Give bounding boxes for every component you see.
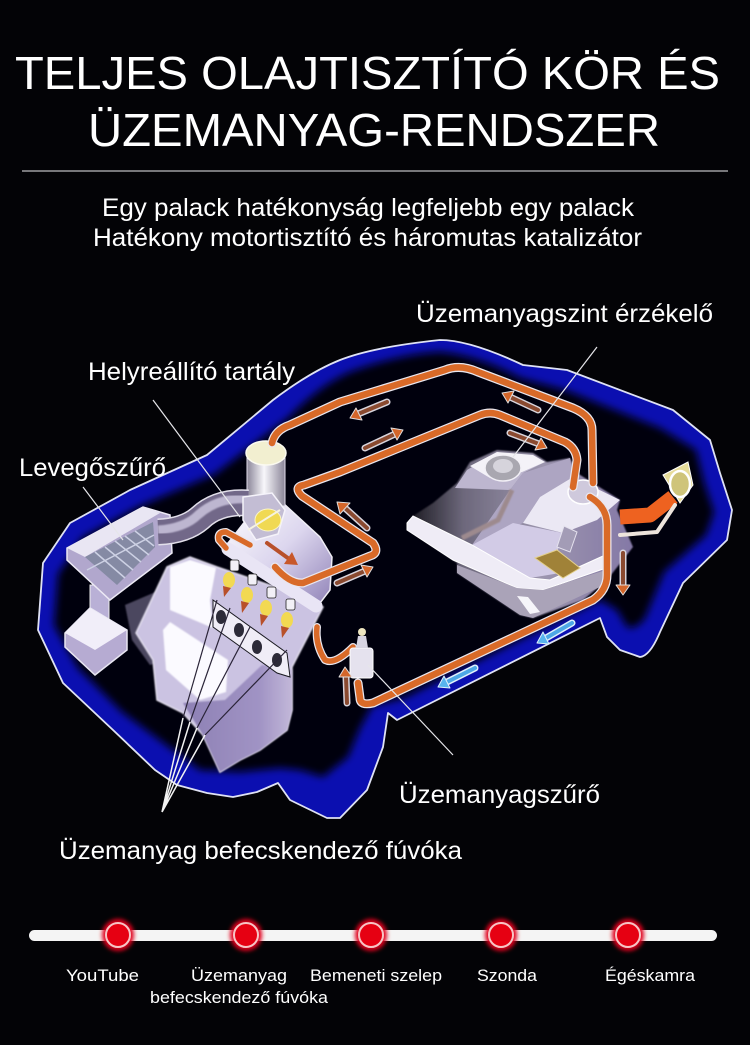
cylinder head — [225, 500, 332, 607]
tank silhouette — [407, 450, 633, 618]
fuel tank — [407, 450, 633, 618]
timeline dots — [102, 919, 644, 951]
fuel rail — [228, 549, 316, 606]
subtitle — [93, 194, 642, 252]
air filter box — [67, 507, 172, 600]
blue arrows — [438, 623, 572, 688]
tank seat — [472, 523, 578, 578]
car silhouette — [38, 340, 732, 818]
fuel pump — [557, 526, 577, 552]
tank skirt highlight — [517, 596, 540, 614]
tank neck — [568, 480, 598, 504]
intake hose — [158, 499, 248, 532]
engine highlight upper — [170, 560, 216, 628]
tank top highlight — [470, 452, 545, 478]
tank right block — [523, 477, 620, 533]
pipe orange — [219, 367, 675, 704]
flow arrows — [267, 391, 630, 703]
timeline labels: Bemeneti szelep — [310, 966, 442, 985]
air filter stand — [65, 585, 127, 675]
intake manifold — [213, 600, 290, 677]
injectors — [223, 560, 295, 638]
throttle body — [243, 493, 285, 540]
timeline labels: Üzemanyag — [191, 966, 287, 985]
leader lines — [83, 347, 597, 812]
label: fuel level sensor: Üzemanyagszint érzékelő — [416, 300, 713, 328]
canister — [246, 441, 286, 506]
orange arrows — [267, 391, 630, 703]
fuel pipes — [219, 367, 675, 704]
label: recovery tank: Helyreállító tartály — [88, 358, 296, 386]
engine lower body — [183, 665, 292, 772]
timeline labels: YouTube — [66, 966, 139, 985]
label: fuel injector: Üzemanyag befecskendező fúvóka — [59, 837, 462, 865]
engine — [65, 441, 332, 772]
subtitle: Egy palack hatékonyság legfeljebb egy palack — [102, 194, 635, 222]
tank skirt — [457, 565, 606, 618]
label: fuel filter: Üzemanyagszűrő — [399, 781, 600, 809]
tank ridge — [472, 458, 573, 545]
pipe casing — [219, 367, 607, 704]
engine block — [136, 557, 323, 772]
title — [15, 47, 720, 156]
title: ÜZEMANYAG-RENDSZER — [88, 104, 660, 156]
timeline labels: Szonda — [477, 966, 538, 985]
timeline bar — [29, 930, 717, 941]
title: TELJES OLAJTISZTÍTÓ KÖR ÉS — [15, 47, 720, 99]
timeline — [29, 919, 717, 1007]
tank top surface — [455, 452, 545, 490]
fuel level sensor — [485, 455, 521, 481]
tank rim — [407, 516, 606, 590]
timeline labels: Égéskamra — [605, 966, 696, 985]
fuel filter — [350, 628, 373, 678]
tank fold stripe — [462, 490, 512, 538]
pump base plate — [535, 550, 580, 578]
timeline labels: befecskendező fúvóka — [150, 988, 329, 1007]
subtitle: Hatékony motortisztító és háromutas katalizátor — [93, 224, 642, 252]
engine highlight lower — [163, 622, 228, 700]
engine shaded side — [125, 585, 172, 665]
filler cap — [663, 462, 693, 503]
timeline labels — [66, 966, 696, 1007]
label: air filter: Levegőszűrő — [19, 454, 166, 482]
